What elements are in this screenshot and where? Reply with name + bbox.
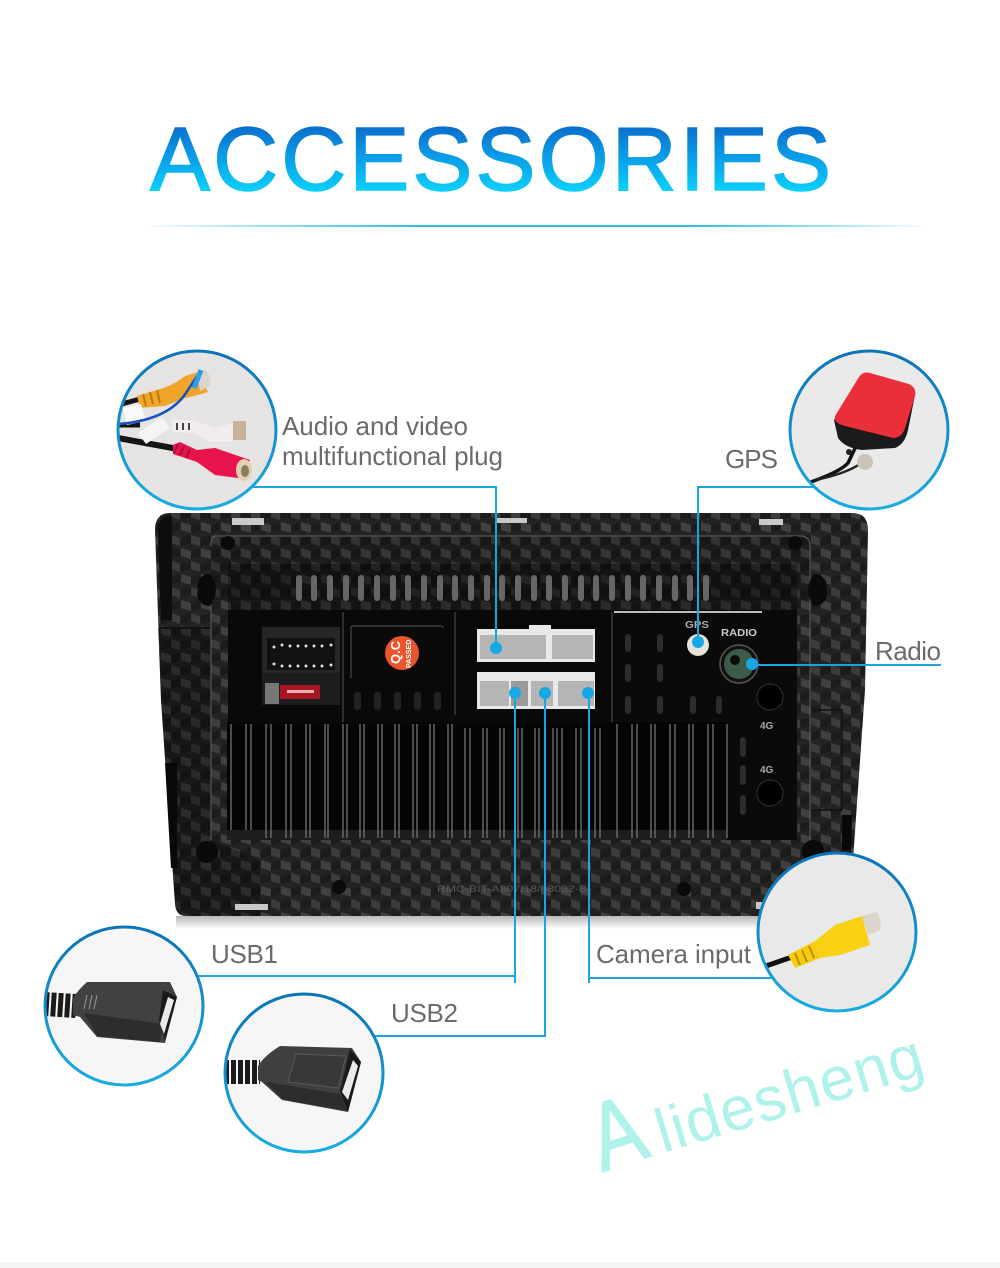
circle: USB2 cable: [224, 994, 383, 1152]
circle: audio and video plug: [118, 351, 276, 509]
watermark: A: [575, 1073, 659, 1192]
circle: USB1 cable: [44, 927, 203, 1085]
USB2 label: USB2: [391, 998, 458, 1028]
watermark: lidesheng: [647, 1021, 932, 1166]
audio label: multifunctional plug: [282, 441, 503, 471]
audio label: Audio and video: [282, 411, 468, 441]
QC label panel: PASSED: [406, 640, 413, 668]
title: ACCESSORIES: [150, 110, 831, 210]
GPS and radio sockets: 4G: [760, 765, 774, 776]
serial number strip: RMC-BIT-A807/18/08032-B: [437, 884, 587, 894]
circle: GPS antenna: [790, 351, 948, 509]
mounting clips: [232, 518, 783, 910]
white wiring connector upper: [477, 625, 595, 662]
device back panel: [155, 513, 868, 929]
GPS label: GPS: [725, 444, 778, 474]
fuse: [280, 685, 320, 699]
red plug: [173, 442, 250, 478]
QC label panel: Q.C: [388, 640, 403, 664]
panel dividers: [343, 612, 612, 722]
watermark: [575, 1021, 932, 1192]
ISO connector: [262, 627, 340, 705]
QC label panel: [351, 626, 443, 710]
Radio label: Radio: [875, 636, 941, 666]
top vents: [296, 575, 709, 601]
Camera input label: Camera input: [596, 939, 752, 969]
white wire labels: [123, 404, 146, 425]
GPS and radio sockets: [625, 620, 783, 815]
title underline: [140, 225, 930, 227]
USB1 label: USB1: [211, 939, 278, 969]
white plug: [172, 420, 233, 442]
white wiring connector lower: [477, 672, 595, 709]
screws: [196, 536, 827, 896]
orange plug: [137, 372, 208, 408]
connector lines: [195, 487, 941, 1036]
GPS and radio sockets: RADIO: [721, 628, 757, 639]
heatsink fins: [231, 724, 727, 838]
GPS and radio sockets: 4G: [760, 721, 774, 732]
blue wire: [119, 376, 197, 424]
black rear panel: [228, 610, 797, 722]
connection dots: [490, 636, 758, 699]
GPS and radio sockets: GPS: [685, 620, 709, 631]
circle: camera plug: [758, 853, 916, 1011]
bottom strip: [0, 1262, 1000, 1268]
